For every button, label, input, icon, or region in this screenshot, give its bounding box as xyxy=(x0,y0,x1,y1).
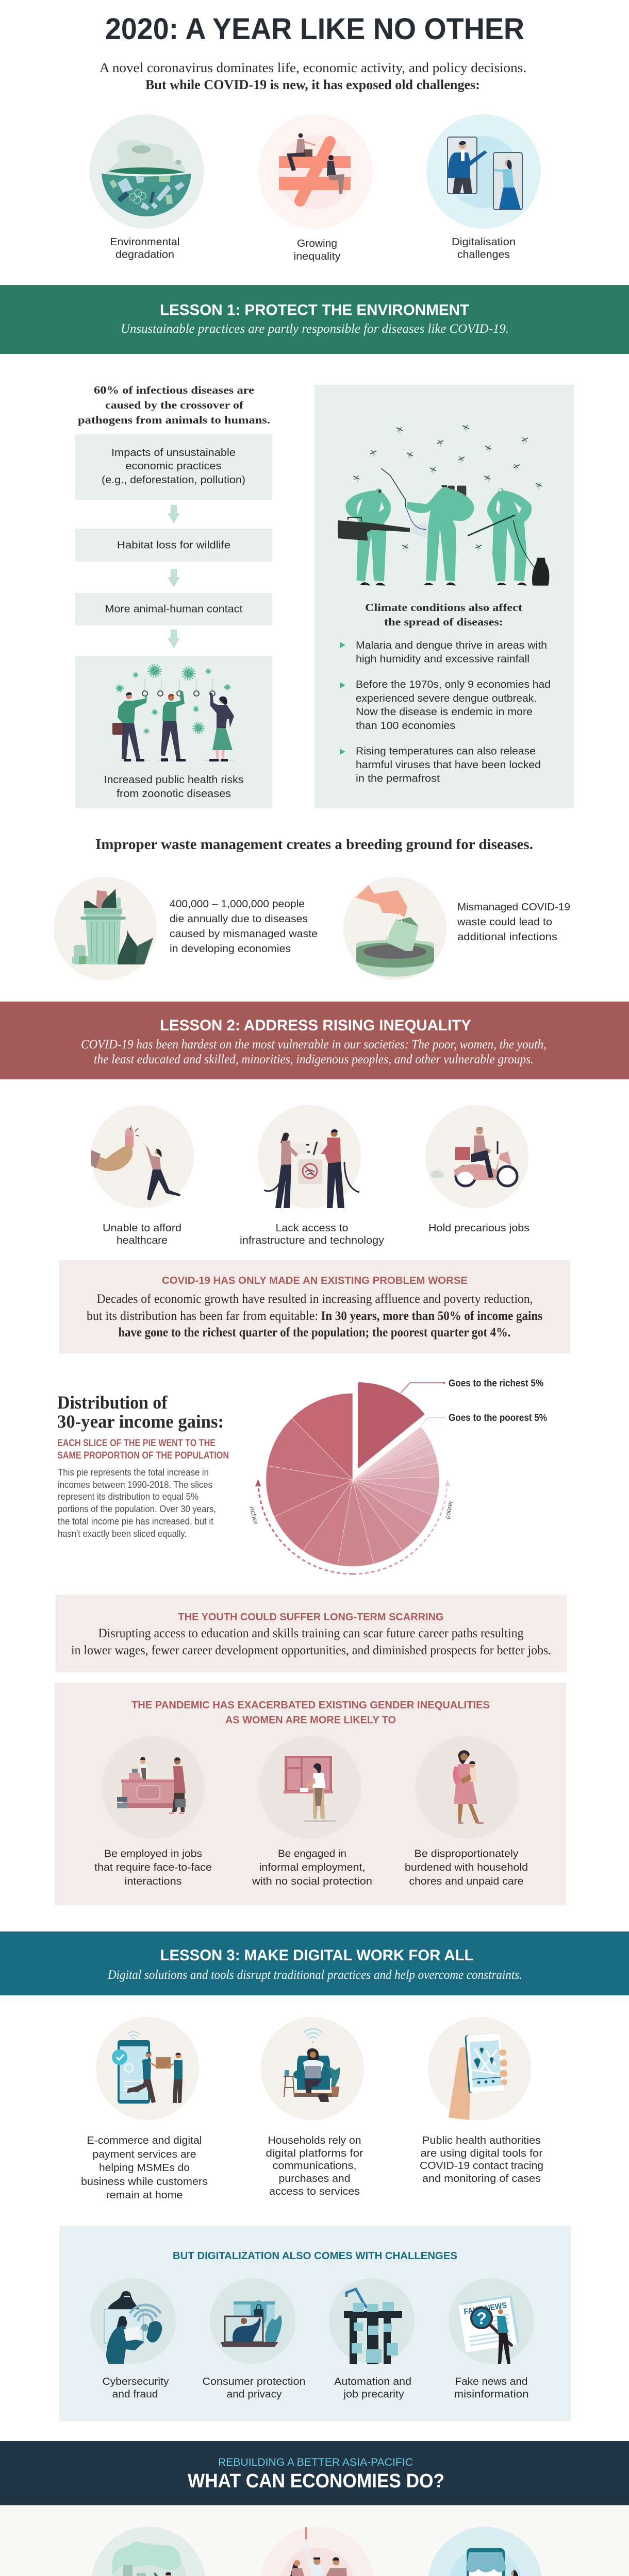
labels: introduction circles: inequality xyxy=(294,251,340,262)
bullet: dengue outbreak: than 100 economies xyxy=(356,720,455,732)
bullet: dengue outbreak: experienced severe dengue outbreak. xyxy=(356,693,537,704)
icon: equitable access xyxy=(260,2527,374,2576)
icon: e-commerce delivery xyxy=(96,2017,199,2120)
intro text: But while COVID-19 is new, it has exposed old challenges: xyxy=(145,77,480,92)
text: pie description: incomes between 1990-2018. The slices xyxy=(58,1480,212,1490)
callout: existing problem xyxy=(59,1260,570,1353)
icon: woman cleaning window xyxy=(258,1736,361,1839)
labels: challenges: and privacy xyxy=(227,2388,282,2400)
panel: digitalization challenges xyxy=(59,2226,571,2421)
heading: distribution of income gains xyxy=(57,1392,224,1432)
panel: gender inequalities: THE PANDEMIC HAS EXACERBATED EXISTING GENDER INEQUALITIES xyxy=(131,1700,490,1711)
subheading: pie explanation xyxy=(57,1438,229,1461)
icon: fake news: ? xyxy=(476,2309,487,2328)
labels: digital benefits: access to services xyxy=(269,2186,360,2197)
subheading: pie explanation: EACH SLICE OF THE PIE WENT TO THE xyxy=(57,1438,216,1449)
callout: richest label xyxy=(401,1378,543,1393)
flow box: animal-human contact xyxy=(75,593,272,625)
bullet: rising temperatures xyxy=(340,746,541,784)
title: 2020: A YEAR LIKE NO OTHER xyxy=(105,12,524,46)
banner: what can economies do: WHAT CAN ECONOMIES DO? xyxy=(188,2470,444,2492)
icon: mosquitoes xyxy=(353,425,542,551)
banner: what can economies do xyxy=(0,2441,629,2505)
panel: rebuilding background xyxy=(0,2505,629,2576)
heading: distribution of income gains: 30-year income gains: xyxy=(57,1411,224,1432)
text: pie description: portions of the population. Over 30 years, xyxy=(58,1504,216,1514)
text: covid waste: Mismanaged COVID-19 xyxy=(457,902,570,913)
label: informal employment: with no social protection xyxy=(252,1876,372,1887)
text: covid waste: additional infections xyxy=(457,931,557,943)
labels: challenges: and fraud xyxy=(112,2388,158,2400)
labels: challenges xyxy=(102,2376,529,2400)
text: waste deaths xyxy=(170,899,318,955)
intro text: A novel coronavirus dominates life, economic activity, and policy decisions. xyxy=(100,60,526,75)
flow box: habitat loss xyxy=(75,529,272,562)
callout: youth scarring: Disrupting access to education and skills training can scar future career paths resulting xyxy=(98,1626,524,1640)
text: waste deaths: in developing economies xyxy=(170,943,291,955)
bullet: malaria and dengue: high humidity and excessive rainfall xyxy=(356,653,529,665)
arrow: richer: richer xyxy=(248,1505,260,1526)
flow box: unsustainable practices: economic practices xyxy=(126,461,222,472)
arrow down 3 xyxy=(168,630,180,648)
heading: infectious diseases: 60% of infectious diseases are xyxy=(94,384,254,396)
heading: waste management: Improper waste management creates a breeding ground for diseases. xyxy=(95,837,533,853)
callout: existing problem: have gone to the richest quarter of the population; the poorest quarter got 4%. xyxy=(119,1326,510,1340)
lesson 2 banner: LESSON 2: ADDRESS RISING INEQUALITY xyxy=(160,1017,471,1034)
icon: contact tracing phone xyxy=(428,2017,531,2120)
label: face-to-face jobs: Be employed in jobs xyxy=(104,1849,202,1860)
text: pie description: hasn't exactly been sliced equally. xyxy=(58,1529,187,1539)
flow box: unsustainable practices: Impacts of unsustainable xyxy=(111,447,236,459)
pie chart: income distribution xyxy=(266,1382,439,1566)
labels: digital benefits: helping MSMEs do xyxy=(99,2162,190,2174)
flow box: public health risks xyxy=(75,656,272,808)
arrow: poorer xyxy=(353,1479,455,1574)
heading: infectious diseases: caused by the crossover of xyxy=(105,399,244,411)
panel: climate conditions: the spread of diseases: xyxy=(384,616,503,628)
icon: unable to afford healthcare xyxy=(91,1105,194,1208)
icon: commuters xyxy=(112,679,234,761)
labels: inequality circles: Unable to afford xyxy=(103,1223,181,1234)
flow box: public health risks: Increased public health risks xyxy=(104,774,243,786)
lesson 1 banner: Unsustainable practices are partly responsible for diseases like COVID-19. xyxy=(121,322,509,336)
callout: existing problem: COVID-19 HAS ONLY MADE AN EXISTING PROBLEM WORSE xyxy=(162,1275,468,1286)
callout: youth scarring: in lower wages, fewer career development opportunities, and diminished prospects for better jobs. xyxy=(71,1643,551,1657)
bullet: malaria and dengue xyxy=(340,640,547,665)
labels: challenges: Consumer protection xyxy=(202,2376,305,2387)
bullet: dengue outbreak: Before the 1970s, only 9 economies had xyxy=(356,679,551,690)
icon: fake news xyxy=(449,2278,534,2364)
panel: digitalization challenges: BUT DIGITALIZATION ALSO COMES WITH CHALLENGES xyxy=(173,2250,457,2262)
labels: inequality circles: Lack access to xyxy=(275,1223,349,1234)
icon: lack of infrastructure xyxy=(258,1105,361,1208)
arrow: richer xyxy=(248,1479,353,1574)
icon: mask in bin xyxy=(343,877,446,980)
labels: digital benefits: purchases and xyxy=(278,2173,351,2184)
labels: inequality circles: Hold precarious jobs xyxy=(428,1223,529,1234)
labels: digital benefits: digital platforms for xyxy=(266,2148,363,2159)
icon: digital economy xyxy=(428,2527,542,2576)
labels: challenges: job precarity xyxy=(343,2388,404,2400)
labels: inequality circles xyxy=(103,1223,529,1246)
label: informal employment: Be engaged in xyxy=(278,1849,346,1860)
labels: digital benefits: payment services are xyxy=(93,2149,196,2160)
icon: cybersecurity xyxy=(90,2278,176,2364)
labels: introduction circles: Environmental xyxy=(110,236,179,248)
labels: digital benefits xyxy=(81,2135,543,2201)
arrow: poorer: poorer xyxy=(443,1500,455,1520)
labels: digital benefits: E-commerce and digital xyxy=(87,2135,202,2146)
lesson 2 banner: the least educated and skilled, minorities, indigenous peoples, and other vulnerable groups. xyxy=(94,1053,534,1066)
label: face-to-face jobs: that require face-to-face xyxy=(94,1862,212,1873)
label: face-to-face jobs: interactions xyxy=(125,1876,181,1887)
lesson 3 banner: LESSON 3: MAKE DIGITAL WORK FOR ALL xyxy=(160,1947,473,1964)
text: waste deaths: 400,000 – 1,000,000 people xyxy=(170,899,305,910)
icon: fake news: FAKE NEWS xyxy=(463,2301,507,2317)
icon: environmental degradation xyxy=(90,114,204,229)
icon: mother and baby xyxy=(416,1736,519,1839)
icon: viruses xyxy=(116,665,230,734)
banner: what can economies do: REBUILDING A BETTER ASIA-PACIFIC xyxy=(218,2456,413,2468)
bullet: rising temperatures: harmful viruses that have been locked xyxy=(356,759,541,771)
bullet: rising temperatures: Rising temperatures can also release xyxy=(356,746,536,757)
icon: workers in protective suits spraying xyxy=(338,468,549,586)
label: informal employment xyxy=(252,1849,372,1887)
flow box: unsustainable practices xyxy=(75,434,272,500)
heading: infectious diseases: pathogens from animals to humans. xyxy=(78,414,270,426)
callout: existing problem: In 30 years, more than 50% of income gains xyxy=(321,1309,542,1323)
label: unpaid care: burdened with household xyxy=(405,1862,528,1873)
lesson 2 banner xyxy=(0,1002,629,1079)
text: covid waste xyxy=(457,902,570,943)
icon: household on laptop xyxy=(261,2017,364,2120)
labels: introduction circles xyxy=(110,236,516,262)
labels: digital benefits: business while customers xyxy=(81,2176,208,2188)
callout: youth scarring xyxy=(56,1595,567,1672)
arrow down 1 xyxy=(168,505,180,523)
text: pie description: This pie represents the total increase in xyxy=(58,1467,209,1478)
labels: challenges: Cybersecurity xyxy=(102,2376,169,2387)
text: pie description xyxy=(58,1467,216,1539)
icon: cashier and customer xyxy=(102,1736,205,1839)
label: unpaid care: chores and unpaid care xyxy=(409,1876,524,1887)
labels: inequality circles: infrastructure and technology xyxy=(240,1235,384,1246)
text: waste deaths: caused by mismanaged waste xyxy=(170,928,318,940)
label: informal employment: informal employment, xyxy=(259,1862,365,1873)
heading: distribution of income gains: Distribution of xyxy=(57,1392,168,1413)
panel: climate conditions xyxy=(314,385,574,808)
bullet: rising temperatures: in the permafrost xyxy=(356,773,440,784)
labels: digital benefits: remain at home xyxy=(106,2190,183,2201)
flow box: animal-human contact: More animal-human contact xyxy=(105,604,243,615)
labels: digital benefits: Public health authorities xyxy=(422,2135,541,2146)
subheading: pie explanation: SAME PROPORTION OF THE POPULATION xyxy=(57,1450,229,1461)
label: unpaid care: Be disproportionately xyxy=(415,1849,519,1860)
labels: introduction circles: Digitalisation xyxy=(452,236,516,248)
panel: gender inequalities: AS WOMEN ARE MORE LIKELY TO xyxy=(225,1715,396,1726)
panel: gender inequalities xyxy=(55,1683,566,1905)
heading: infectious diseases xyxy=(78,384,270,426)
labels: challenges: Automation and xyxy=(334,2376,411,2387)
label: face-to-face jobs xyxy=(94,1849,212,1887)
lesson 1 banner: LESSON 1: PROTECT THE ENVIRONMENT xyxy=(160,302,469,318)
labels: challenges: Fake news and xyxy=(455,2376,528,2387)
arrow down 2 xyxy=(168,569,180,587)
callout: existing problem: Decades of economic growth have resulted in increasing affluence and poverty reduction, xyxy=(97,1292,533,1306)
callout: richest label: Goes to the richest 5% xyxy=(449,1378,543,1389)
text: waste deaths: die annually due to diseases xyxy=(170,913,308,925)
labels: digital benefits: are using digital tools for xyxy=(421,2148,543,2159)
flow box: public health risks: from zoonotic diseases xyxy=(117,788,231,800)
callout: youth scarring: THE YOUTH COULD SUFFER LONG-TERM SCARRING xyxy=(178,1612,443,1623)
bullet: dengue outbreak xyxy=(340,679,551,732)
labels: introduction circles: challenges xyxy=(457,249,510,261)
labels: digital benefits: Households rely on xyxy=(268,2135,361,2146)
icon: green jobs xyxy=(91,2527,206,2576)
lesson 3 banner xyxy=(0,1931,629,1995)
labels: digital benefits: COVID-19 contact tracing xyxy=(420,2160,543,2172)
labels: digital benefits: communications, xyxy=(272,2160,357,2172)
icon: growing inequality xyxy=(258,114,373,229)
flow box: habitat loss: Habitat loss for wildlife xyxy=(117,540,230,551)
intro text xyxy=(100,60,526,92)
icon: digitalisation challenges xyxy=(426,114,541,229)
labels: challenges: misinformation xyxy=(454,2388,529,2400)
callout: existing problem: but its distribution has been far from equitable: xyxy=(87,1309,318,1323)
lesson 1 banner xyxy=(0,285,629,354)
text: covid waste: waste could lead to xyxy=(457,917,552,928)
icon: precarious jobs scooter xyxy=(425,1105,528,1208)
icon: consumer protection xyxy=(210,2278,295,2364)
text: pie description: the total income pie has increased, but it xyxy=(58,1516,213,1527)
labels: introduction circles: Growing xyxy=(297,238,337,249)
labels: introduction circles: degradation xyxy=(115,249,174,261)
icon: trash can xyxy=(54,877,157,980)
bullet: dengue outbreak: Now the disease is endemic in more xyxy=(356,706,533,718)
labels: digital benefits: and monitoring of cases xyxy=(422,2173,541,2184)
callout: poorest label xyxy=(421,1413,547,1425)
text: pie description: represent its distribution to equal 5% xyxy=(58,1492,198,1502)
label: unpaid care xyxy=(405,1849,528,1887)
lesson 3 banner: Digital solutions and tools disrupt traditional practices and help overcome constraints. xyxy=(107,1968,522,1982)
flow box: unsustainable practices: (e.g., deforestation, pollution) xyxy=(102,474,245,486)
icon: automation xyxy=(329,2278,415,2364)
bullet: malaria and dengue: Malaria and dengue thrive in areas with xyxy=(356,640,547,651)
labels: inequality circles: healthcare xyxy=(117,1235,168,1246)
callout: poorest label: Goes to the poorest 5% xyxy=(449,1413,547,1423)
panel: climate conditions: Climate conditions also affect xyxy=(365,601,522,614)
lesson 2 banner: COVID-19 has been hardest on the most vulnerable in our societies: The poor, women, the youth, xyxy=(81,1038,547,1052)
